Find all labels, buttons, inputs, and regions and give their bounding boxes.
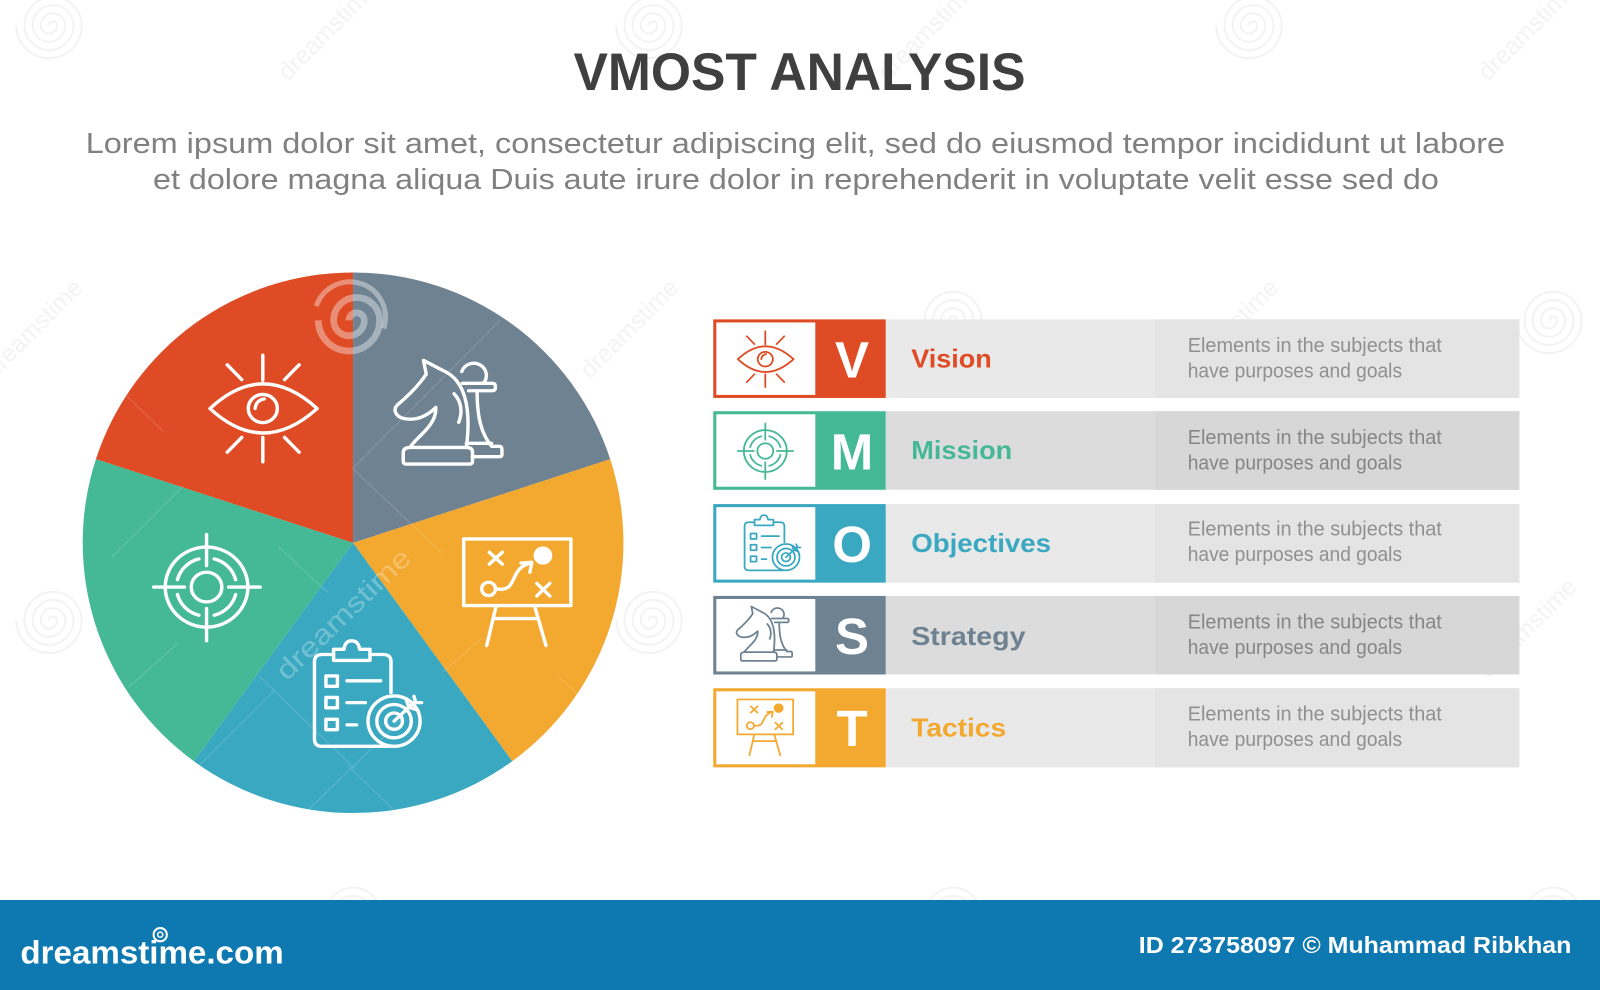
watermark pattern: dreamstime — [575, 274, 684, 384]
icon: chess pieces — [395, 360, 502, 464]
description: have purposes and goals — [1188, 544, 1402, 566]
footer logo: dreamstime.com — [20, 933, 284, 970]
segment: vision — [96, 272, 353, 543]
watermark on pie: dreamstime — [269, 542, 417, 686]
description — [1188, 703, 1442, 751]
description: Elements in the subjects that — [1188, 427, 1442, 449]
description: have purposes and goals — [1188, 637, 1402, 659]
subtitle text: et dolore magna aliqua Duis aute irure dolor in reprehenderit in voluptate velit esse sed do — [153, 164, 1439, 196]
footer credit: ID 273758097 © Muhammad Ribkhan — [1139, 932, 1571, 958]
segment: tactics — [353, 459, 623, 761]
row: tactics — [713, 688, 1519, 767]
footer bar — [0, 900, 1600, 990]
icon: clipboard with target — [314, 641, 422, 746]
row: strategy — [713, 596, 1519, 674]
icon: crosshair target — [738, 423, 793, 479]
letter S: S — [835, 608, 869, 665]
letter T: T — [836, 700, 868, 757]
description: Elements in the subjects that — [1188, 335, 1442, 357]
description: Elements in the subjects that — [1188, 612, 1442, 634]
label: Objectives — [911, 530, 1051, 558]
description — [1188, 519, 1442, 566]
description — [1188, 612, 1442, 659]
subtitle text: Lorem ipsum dolor sit amet, consectetur adipiscing elit, sed do eiusmod tempor incididunt ut labore — [86, 128, 1505, 160]
description: have purposes and goals — [1188, 452, 1402, 474]
icon: eye — [210, 355, 317, 462]
row: objectives — [713, 504, 1519, 583]
subtitle text — [86, 128, 1505, 196]
description: have purposes and goals — [1188, 361, 1402, 383]
icon: eye — [738, 331, 794, 387]
description: have purposes and goals — [1188, 729, 1402, 751]
segment: objectives — [194, 543, 512, 813]
icon: chess pieces — [737, 607, 792, 661]
icon: strategy board — [737, 699, 793, 755]
row: mission — [713, 411, 1519, 490]
icon: crosshair target — [154, 534, 260, 641]
watermark pattern: dreamstime — [1175, 274, 1284, 384]
description: Elements in the subjects that — [1188, 519, 1442, 541]
segment: strategy — [353, 272, 610, 543]
label: Tactics — [911, 715, 1006, 743]
label: Mission — [911, 437, 1012, 465]
icon: strategy board — [464, 539, 571, 646]
row: vision — [713, 319, 1519, 398]
icon: clipboard with target — [745, 515, 800, 570]
segment: mission — [83, 459, 353, 761]
letter O: O — [832, 516, 872, 573]
watermark on pie — [112, 282, 607, 809]
watermark pattern: dreamstime — [1473, 573, 1582, 683]
letter V: V — [835, 332, 869, 389]
description: Elements in the subjects that — [1188, 703, 1442, 725]
description — [1188, 427, 1442, 474]
letter M: M — [831, 423, 873, 480]
label: Strategy — [911, 623, 1026, 651]
description — [1188, 335, 1442, 383]
pie chart — [83, 272, 623, 813]
title: VMOST ANALYSIS — [573, 43, 1026, 102]
label: Vision — [911, 345, 992, 373]
